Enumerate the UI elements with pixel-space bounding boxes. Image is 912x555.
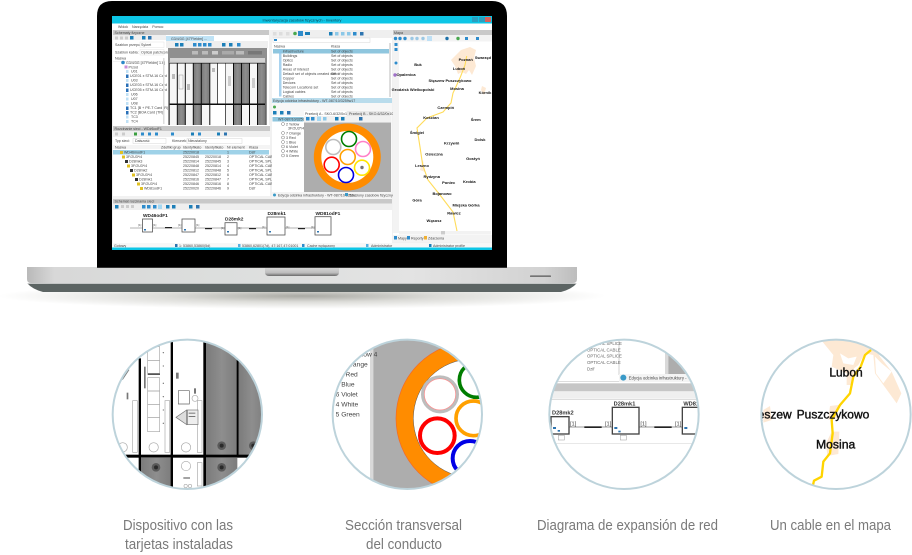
tree bbox=[121, 61, 169, 124]
detail circle: conduit cross-section bbox=[332, 338, 483, 490]
table rows: 2 bbox=[227, 155, 229, 159]
map labels: Krobia bbox=[463, 179, 476, 184]
table rows: 5 bbox=[227, 168, 229, 172]
panel: network cut table bbox=[113, 125, 279, 196]
list rows: Logical cables bbox=[283, 90, 306, 94]
fibre tree: 3 Red bbox=[286, 136, 296, 140]
map labels: Mosina bbox=[816, 438, 856, 452]
map labels: Poznań bbox=[459, 57, 473, 62]
list rows: Telecom Locations set bbox=[283, 86, 318, 90]
map labels: Kościan bbox=[423, 115, 439, 120]
tree: U01 bbox=[131, 70, 138, 74]
list rows: Set of objects bbox=[331, 54, 353, 58]
fibre tree: 2 Yellow bbox=[286, 122, 300, 126]
diagram nodes: [1] bbox=[238, 226, 242, 230]
list rows: Set of objects bbox=[331, 63, 353, 67]
map labels: Stęszew bbox=[746, 408, 792, 422]
tree: UCE05 x STM-16 Card bbox=[130, 88, 167, 92]
fibre tree: WT-087/10/3259 bbox=[278, 118, 305, 122]
map labels: Miejska Górka bbox=[452, 202, 480, 208]
table text: OPTICAL CABLE bbox=[587, 347, 621, 352]
diagram nodes: D28mk1 bbox=[268, 211, 286, 217]
fibre tree: 5 Green bbox=[286, 154, 299, 158]
list rows: Set of objects bbox=[331, 68, 353, 72]
tree: TC2 [BOA Card (TR)] bbox=[130, 110, 164, 114]
table text: OPTICAL SPLICE bbox=[587, 354, 622, 359]
list rows: Set of objects bbox=[331, 90, 353, 94]
table rows: 25220814 bbox=[183, 160, 199, 164]
panel: physical schemes: Sykret bbox=[141, 43, 151, 47]
table rows: 25220847 bbox=[205, 178, 221, 182]
list rows: Optics bbox=[283, 58, 293, 62]
caption: section: del conducto bbox=[366, 537, 442, 553]
fibre tree: 4 White bbox=[286, 149, 298, 153]
laptop lid bezel bbox=[97, 1, 507, 268]
diagram nodes: [1] bbox=[178, 223, 182, 227]
table rows: 25220816 bbox=[183, 178, 199, 182]
status bar bbox=[112, 243, 492, 250]
detail circle: network expansion diagram: [1] bbox=[675, 421, 682, 427]
table rows: OPTICAL CABLE bbox=[249, 155, 278, 159]
tree: U07 bbox=[131, 97, 138, 101]
detail circle: network expansion diagram: D28mk2 bbox=[552, 411, 574, 417]
map labels: Wąsosz bbox=[427, 218, 441, 223]
panel: network cut table: Identyfikato bbox=[205, 145, 223, 149]
diagram nodes: D28mk2 bbox=[225, 216, 244, 222]
diagram nodes: [1] bbox=[311, 225, 315, 229]
table rows: 3F/2U3*/4 bbox=[136, 173, 152, 177]
table rows: OPTICAL CABLE bbox=[249, 182, 278, 186]
fibre list: 4 White bbox=[336, 402, 359, 409]
diagram nodes: WD46odF1 bbox=[143, 213, 168, 219]
panel: network cut table: Rozcinanie sieci - WD#6odF1 bbox=[114, 127, 162, 131]
list rows: Set of objects bbox=[331, 94, 353, 98]
title bar: Inwentaryzacja zasobów fizycznych - Inventory bbox=[263, 18, 342, 22]
table rows: 3 bbox=[227, 160, 229, 164]
panel: infrastructure section editor: Przekrój A - SKO-6/32/0x10 (.. bbox=[305, 112, 353, 116]
cable route bbox=[417, 56, 467, 231]
map labels: Leszno bbox=[415, 163, 429, 168]
nodes bbox=[570, 426, 682, 428]
panel: map: Reporty bbox=[411, 236, 424, 240]
table rows: 7 bbox=[227, 178, 229, 182]
panel: network diagram: Schemat rozcinania sieci bbox=[114, 200, 154, 204]
map labels: Czempiń bbox=[437, 105, 455, 110]
map labels: Mosina bbox=[450, 86, 465, 91]
detail circle: network expansion diagram: [1] bbox=[570, 421, 577, 427]
table text: OPTICAL SPLICE bbox=[587, 341, 622, 346]
map labels: Grodzisk Wielkopolski bbox=[392, 87, 434, 92]
panel: physical schemes: Optical patchcord bbox=[141, 50, 169, 54]
map labels: Góra bbox=[412, 198, 422, 202]
list rows: Devices bbox=[283, 81, 296, 85]
laptop shadow bbox=[0, 283, 606, 309]
tree: UCE03 x STM-16 Card bbox=[130, 83, 167, 87]
diagram nodes: [1] bbox=[196, 223, 200, 227]
panel: map: Mapa bbox=[394, 31, 403, 35]
detail circle: network expansion diagram: Edycja odcinka infrastruktury - bbox=[629, 376, 687, 381]
panel: network cut table: Kierunek: bbox=[172, 139, 187, 143]
caption: map: Un cable en el mapa bbox=[770, 518, 892, 534]
map labels: Opalenica bbox=[396, 72, 416, 77]
fibre list: 7 Orange bbox=[340, 362, 368, 369]
panel: infrastructure section editor: Przekrój B - SKO-6/32/0x10 (.. bbox=[349, 112, 398, 116]
tree: U08 bbox=[131, 102, 138, 106]
table rows: Dzif bbox=[249, 150, 255, 154]
panel: map: Zdarzenia bbox=[428, 236, 444, 240]
table text: Dzif bbox=[587, 366, 595, 371]
detail circle: network expansion diagram: [1] bbox=[605, 421, 612, 427]
fibre list: 2 Yellow 4 bbox=[347, 352, 378, 359]
tree: TC3 bbox=[131, 115, 138, 119]
map labels: Krzywiń bbox=[444, 140, 460, 146]
panel: network cut table: Typ sieci: bbox=[115, 139, 130, 143]
table rows: 25220812 bbox=[205, 173, 221, 177]
fibre list: 1 Blue bbox=[336, 382, 355, 389]
panel: physical schemes: Szablon przepustu: bbox=[115, 43, 146, 47]
status bar: Cache wyłączony bbox=[307, 244, 335, 248]
map labels: Puszczykowo bbox=[797, 408, 870, 422]
table text bbox=[587, 341, 622, 371]
list rows: Set of objects bbox=[331, 76, 353, 80]
panel: network cut table: Dalszość bbox=[135, 139, 150, 143]
diagram nodes: [1] bbox=[262, 225, 266, 229]
diagram nodes bbox=[130, 211, 341, 235]
tree: TC4 bbox=[131, 120, 138, 124]
table rows: 25220814 bbox=[205, 164, 221, 168]
table rows bbox=[120, 150, 279, 190]
map labels: Rydzyna bbox=[423, 174, 441, 179]
map labels: Bojanowo bbox=[432, 191, 452, 196]
list rows: Default set of objects created with t bbox=[283, 72, 339, 76]
caption: device bbox=[123, 518, 233, 553]
tree: G3/4/3G [47'Fieldm] 1.6] bbox=[126, 61, 165, 65]
table rows: D28mk1 bbox=[139, 178, 152, 182]
panel: infrastructure section editor: Edycja odcinka infrastruktury - WT-087/10/3259w17 bbox=[273, 99, 355, 103]
table rows: 25220846 bbox=[205, 186, 221, 190]
panel: network cut table: Nr element bbox=[227, 145, 245, 149]
panel: infrastructure section editor: Edycja odcinka infrastruktury - WT-087/10/3259... bbox=[278, 194, 357, 198]
table rows: 25220845 bbox=[205, 160, 221, 164]
tree: U03 bbox=[131, 78, 138, 82]
table rows: WD81odF1 bbox=[144, 186, 162, 190]
table rows: 25220845 bbox=[183, 155, 199, 159]
map area shapes bbox=[451, 47, 476, 75]
panel: infrastructure section editor bbox=[272, 98, 398, 199]
detail circle: device with installed cards bbox=[113, 337, 265, 489]
table text: OPTICAL CABLE bbox=[587, 360, 621, 365]
map labels: Luboń bbox=[453, 66, 466, 71]
tree: UCE01 x STM-16 Card bbox=[130, 74, 167, 78]
table rows: 8 bbox=[227, 182, 229, 186]
cable cross-section bbox=[304, 122, 391, 192]
panel: physical schemes bbox=[113, 30, 269, 125]
map labels: Gostyń bbox=[466, 156, 480, 161]
table rows: 25220848 bbox=[183, 164, 199, 168]
panel: map: Mapy bbox=[398, 236, 407, 240]
panel: network cut table: Nazwa bbox=[115, 145, 126, 149]
list rows: Set of objects bbox=[331, 86, 353, 90]
list rows: Set of objects bbox=[331, 72, 353, 76]
list rows: Set of objects bbox=[331, 58, 353, 62]
table rows: 3F/2U3*/4 bbox=[141, 182, 157, 186]
diagram nodes: [1] bbox=[153, 223, 157, 227]
table rows: 25220018 bbox=[205, 155, 221, 159]
map labels: Kórnik bbox=[479, 90, 492, 95]
status bar: Administrator bbox=[371, 244, 393, 248]
menu bar: Widok Narzędzia Pomoc bbox=[118, 25, 164, 29]
laptop base bbox=[27, 267, 577, 292]
panel: physical schemes: Szablon kabla: bbox=[115, 50, 139, 54]
status bar: Gotowy bbox=[114, 244, 126, 248]
fibre tree: 6 Violet bbox=[286, 145, 298, 149]
map labels: Śrem bbox=[471, 117, 481, 122]
table rows: D28mk3 bbox=[129, 160, 142, 164]
list rows bbox=[279, 50, 353, 98]
fibre tree: 3F/2U3*/4 bbox=[288, 127, 304, 131]
diagram nodes: [1] bbox=[138, 223, 142, 227]
table rows: 4 bbox=[227, 164, 229, 168]
map labels: Swarzęd bbox=[475, 55, 492, 60]
detail circle: network expansion diagram: [1] bbox=[640, 421, 647, 427]
panel: physical schemes: Nazwa bbox=[115, 56, 126, 60]
table rows: 25220846 bbox=[183, 182, 199, 186]
panel: map bbox=[392, 30, 492, 242]
panel: network cut table: Zdefiiki grup bbox=[161, 145, 181, 149]
list rows: Set of objects bbox=[331, 50, 353, 54]
map labels: Buk bbox=[414, 62, 423, 67]
tree: TC1 [B + PE-T Card (R)] bbox=[130, 106, 169, 110]
map labels: Śmigiel bbox=[410, 130, 424, 135]
fibre tree: 1 Blue bbox=[286, 140, 296, 144]
list rows: Copper bbox=[283, 76, 295, 80]
panel: network cut table: Klasa bbox=[249, 145, 258, 149]
map labels: Poniec bbox=[442, 180, 456, 185]
panel: infrastructure list: Nazwa bbox=[274, 44, 285, 48]
fibre tree bbox=[272, 116, 305, 192]
status bar: Administrator profile bbox=[433, 244, 465, 248]
table rows: D28mk2 bbox=[134, 168, 147, 172]
table rows: 25220020 bbox=[183, 186, 199, 190]
table rows: 1 bbox=[227, 150, 229, 154]
map labels: Osieczna bbox=[425, 152, 444, 156]
table rows: 3F/2U3*/4 bbox=[126, 155, 142, 159]
map labels bbox=[762, 367, 869, 449]
table rows: WD46modF1 bbox=[124, 150, 145, 154]
list rows: Buildings bbox=[283, 54, 297, 58]
list rows: Set of objects bbox=[331, 81, 353, 85]
table rows: 25220018 bbox=[183, 150, 199, 154]
menu bar bbox=[112, 24, 492, 30]
list rows: Cables bbox=[283, 94, 294, 98]
map labels: Stęszew Puszczykowo bbox=[429, 78, 472, 83]
table rows: 3F/2U3*/4 bbox=[131, 164, 147, 168]
fibre list: 5 Green bbox=[336, 412, 360, 419]
rack bbox=[168, 48, 267, 125]
table rows: 25220848 bbox=[205, 168, 221, 172]
device rack view bbox=[166, 36, 268, 125]
title bar bbox=[112, 16, 492, 24]
table rows: OPTICAL SPLICE bbox=[249, 160, 279, 164]
panel: infrastructure section editor: Szablony zasobów fizycznych bbox=[349, 194, 397, 198]
device rack view: G3/4/3G [47'Fieldm] ... bbox=[171, 37, 207, 41]
map toolbar icons bbox=[393, 36, 479, 77]
diagram nodes: [1] bbox=[221, 226, 225, 230]
table rows: OPTICAL SPLICE bbox=[249, 168, 279, 172]
table rows: 9 bbox=[227, 186, 229, 190]
detail circle: network expansion diagram bbox=[548, 338, 700, 490]
caption: device: Dispositivo con las bbox=[123, 518, 233, 534]
fibre list bbox=[336, 352, 378, 419]
caption: device: tarjetas instaladas bbox=[125, 537, 233, 553]
panel: infrastructure list: Klasa bbox=[331, 44, 340, 48]
table rows: Dzif bbox=[249, 186, 255, 190]
list rows: Infrastructure bbox=[283, 50, 304, 54]
caption: section bbox=[345, 518, 462, 553]
fibre tree: 7 Orange bbox=[286, 131, 301, 135]
fibre list: 6 Violet bbox=[336, 392, 358, 399]
status bar: 53860,62801(7d), 47:167,47:01001 bbox=[242, 244, 298, 248]
panel: network cut table: Nieustalony bbox=[188, 139, 207, 143]
caption: section: Sección transversal bbox=[345, 518, 462, 534]
map labels: Dolsk bbox=[475, 137, 486, 142]
table rows: 25220847 bbox=[183, 173, 199, 177]
panel: physical schemes: Schematy fizyczne bbox=[114, 31, 144, 35]
panel: network diagram bbox=[113, 199, 392, 243]
table rows: 6 bbox=[227, 173, 229, 177]
table rows: OPTICAL CABLE bbox=[249, 173, 278, 177]
map labels: Rawicz bbox=[447, 210, 461, 216]
fibre list: 3 Red bbox=[340, 372, 358, 379]
list rows: Radio bbox=[283, 63, 292, 67]
diagram nodes: WD81odF1 bbox=[316, 211, 341, 217]
laptop bbox=[0, 1, 606, 309]
table rows: 25220816 bbox=[205, 182, 221, 186]
map labels: Luboń bbox=[829, 365, 863, 379]
panel: infrastructure list bbox=[272, 30, 392, 98]
diagram nodes: [1] bbox=[286, 225, 290, 229]
application screen bbox=[112, 16, 492, 250]
detail circle: cable on the map bbox=[746, 337, 911, 489]
map labels bbox=[392, 55, 492, 223]
tree: Przód bbox=[128, 66, 138, 70]
table rows: OPTICAL SPLICE bbox=[249, 178, 279, 182]
detail circle: network expansion diagram: WD81odF1 bbox=[683, 401, 713, 407]
caption: diagram: Diagrama de expansión de red bbox=[537, 518, 718, 534]
list rows: Areas of interest bbox=[283, 68, 309, 72]
status bar: 1: 53860,53860(5d) bbox=[179, 244, 210, 248]
table rows: 25220812 bbox=[183, 168, 199, 172]
detail circle: network expansion diagram: D28mk1 bbox=[614, 401, 635, 407]
tree: U06 bbox=[131, 92, 138, 96]
table rows: OPTICAL CABLE bbox=[249, 164, 278, 168]
panel: network cut table: Identyfikato bbox=[183, 145, 201, 149]
